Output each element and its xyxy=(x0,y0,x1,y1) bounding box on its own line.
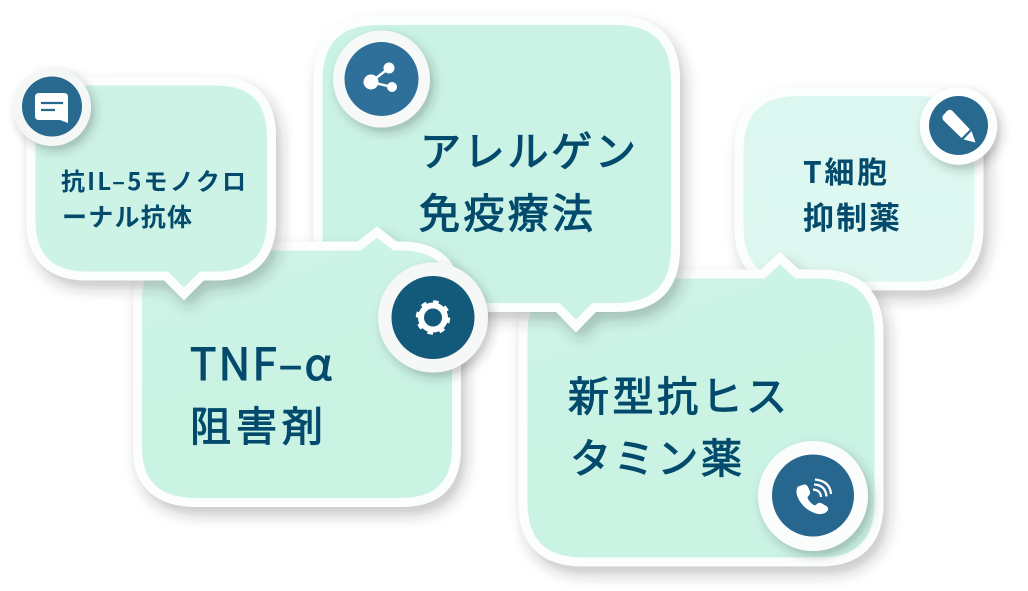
text: T cell inhibitors: T細胞 xyxy=(803,148,887,192)
text: TNF-alpha inhibitors: TNF–α xyxy=(190,329,332,393)
text: new antihistamines: 新型抗ヒス xyxy=(568,363,787,423)
panel: T cell inhibitors xyxy=(739,92,979,286)
icon: pencil xyxy=(920,87,997,165)
text: anti-IL-5 monoclonal antibodies xyxy=(61,162,246,234)
icon: chat xyxy=(13,68,91,146)
text: new antihistamines: タミン薬 xyxy=(570,425,742,485)
icon: phone xyxy=(758,441,868,551)
panel: new antihistamines xyxy=(523,258,879,562)
text: TNF-alpha inhibitors xyxy=(190,329,332,453)
panel: anti-IL-5 monoclonal antibodies xyxy=(31,81,272,294)
icon: gear xyxy=(378,262,488,372)
panel: TNF-alpha inhibitors xyxy=(138,232,456,502)
text: allergen immunotherapy: アレルゲン xyxy=(420,118,636,178)
text: anti-IL-5 monoclonal antibodies: 抗IL–5モノクロ xyxy=(61,162,246,197)
text: TNF-alpha inhibitors: 阻害剤 xyxy=(190,393,323,453)
text: new antihistamines xyxy=(568,363,787,485)
panel: allergen immunotherapy xyxy=(318,20,676,326)
text: allergen immunotherapy: 免疫療法 xyxy=(419,180,593,240)
text: T cell inhibitors: 抑制薬 xyxy=(803,193,900,238)
text: T cell inhibitors xyxy=(803,148,900,238)
text: anti-IL-5 monoclonal antibodies: ーナル抗体 xyxy=(62,198,192,234)
icon: share xyxy=(333,30,430,128)
text: allergen immunotherapy xyxy=(419,118,636,240)
